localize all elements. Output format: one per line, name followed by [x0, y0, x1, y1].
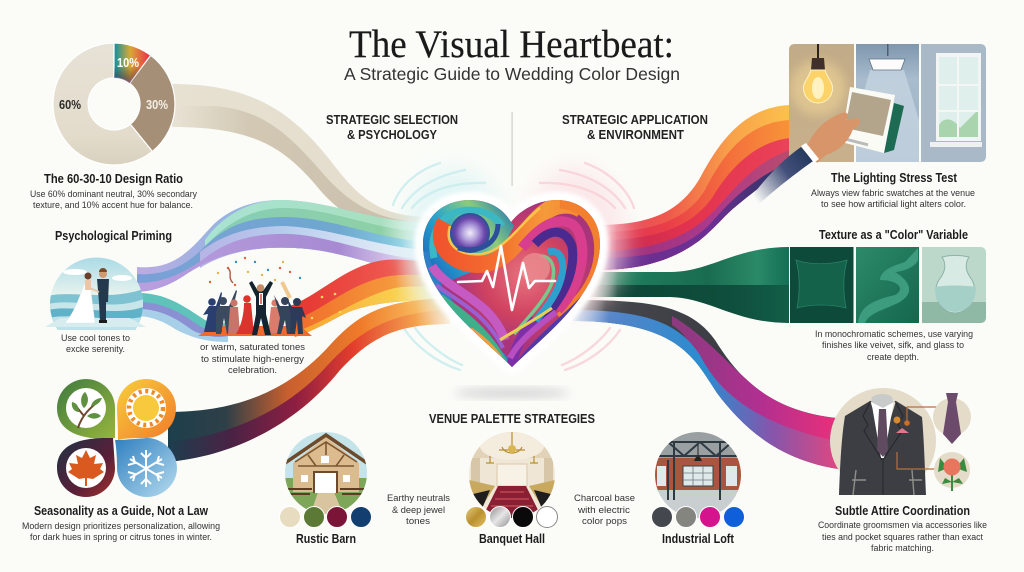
sleeve [752, 143, 819, 205]
dancer: red dress [236, 295, 254, 334]
ribbon: cool upper [137, 200, 425, 292]
text: barn palette [387, 493, 450, 527]
heading: venue palette strategies: VENUE PALETTE STRATEGIES [429, 411, 595, 426]
title: The Visual Heartbeat: [349, 23, 674, 66]
heading: psychological priming: Psychological Priming [55, 228, 172, 243]
text: design ratio: The 60-30-10 Design Ratio [44, 171, 183, 186]
tile: window daylight [921, 44, 986, 162]
tile: glass vase [922, 247, 986, 323]
donut chart: 60-30-10: 10% [117, 56, 139, 70]
text: design ratio: texture, and 10% accent hue for balance. [33, 200, 193, 211]
subtitle: A Strategic Guide to Wedding Color Design [344, 64, 680, 84]
text: texture [815, 329, 973, 363]
heart halo [423, 200, 600, 367]
swatches: loft [652, 506, 744, 528]
panel: lighting stress test [752, 44, 986, 205]
heart shadow [454, 389, 570, 397]
ribbon: warm [285, 259, 445, 337]
text: hall palette: with electric [577, 505, 630, 516]
text: design ratio: Use 60% dominant neutral, 30% secondary [30, 189, 197, 200]
text: cool tones: Use cool tones to [61, 333, 130, 344]
detail: tie [933, 393, 971, 444]
swatches: hall [466, 506, 558, 528]
text: cool tones: excke serenity. [66, 344, 125, 355]
dancer: dark far right [287, 298, 306, 334]
dancer: salmon [228, 299, 240, 334]
ribbon: emerald [590, 247, 789, 323]
text: texture: create depth. [867, 352, 919, 363]
jacket [839, 394, 926, 495]
heart with heartbeat line [423, 200, 600, 367]
ribbon: seasonality [168, 298, 450, 462]
text: seasonality: Modern design prioritizes personalization, allowing [22, 521, 220, 532]
text: warm tones: or warm, saturated tones [200, 342, 305, 353]
text: lighting: Always view fabric swatches at the venue [811, 188, 975, 199]
ribbon: cool lower [138, 293, 228, 342]
text: seasonality [22, 503, 220, 543]
text: design ratio [30, 171, 197, 211]
venue: industrial loft: Industrial Loft [662, 531, 735, 546]
text: lighting [811, 170, 975, 210]
dancer: grey suit [216, 290, 237, 334]
text: barn palette: tones [406, 516, 430, 527]
heading: strategic application: & ENVIRONMENT [587, 127, 684, 142]
tile: silk ribbon [856, 247, 919, 323]
swatch cards [841, 87, 904, 153]
dancer: dark right [274, 295, 293, 334]
panel: texture tiles [790, 247, 986, 323]
ribbon: charcoal magenta blue [572, 300, 839, 469]
venue: banquet hall [466, 432, 558, 546]
text: barn palette: Earthy neutrals [387, 493, 450, 504]
illustration: suit with accessories [830, 388, 971, 495]
donut chart: 60-30-10: 30% [146, 98, 168, 112]
icon: snowflake [128, 450, 164, 487]
text: attire: ties and pocket squares rather than exact [822, 532, 983, 543]
text: texture: In monochromatic schemes, use varying [815, 329, 973, 340]
heading: strategic selection: STRATEGIC SELECTION [326, 112, 458, 127]
venue: industrial loft [652, 432, 744, 546]
text: cool tones [61, 333, 130, 355]
swatches: barn [280, 506, 372, 528]
venue: banquet hall: Banquet Hall [479, 531, 545, 546]
text: attire: Coordinate groomsmen via accessories like [818, 520, 987, 531]
text: attire: Subtle Attire Coordination [835, 503, 970, 518]
dancer: blue dress [203, 292, 222, 332]
icon: sun [129, 391, 163, 425]
text: attire: fabric matching. [871, 543, 934, 554]
glow behind heart [393, 163, 634, 370]
text: seasonality: for dark hues in spring or citrus tones in winter. [30, 532, 212, 543]
text: attire [818, 503, 987, 554]
illustration: couple by the sea [45, 256, 146, 330]
hand holding swatch [807, 113, 860, 163]
tile: fluorescent [856, 44, 919, 162]
heading: texture: Texture as a "Color" Variable [819, 227, 968, 242]
icon: maple leaf [68, 450, 104, 486]
text: lighting: The Lighting Stress Test [831, 170, 958, 185]
venue: rustic barn: Rustic Barn [296, 531, 356, 546]
heading: strategic application [562, 112, 708, 142]
dancer: salmon right [268, 299, 282, 333]
text: warm tones: celebration. [228, 365, 277, 376]
heading: strategic selection: & PSYCHOLOGY [347, 127, 437, 142]
illustration: dancing crowd [198, 257, 312, 336]
connector lines [897, 407, 942, 469]
donut chart: 60-30-10: 60% [59, 98, 81, 112]
text: lighting: to see how artificial light alters color. [821, 199, 966, 210]
heartbeat line [458, 246, 555, 310]
ribbon: warm to purple, right [598, 105, 790, 270]
detail: boutonniere [934, 452, 970, 491]
icon: four seasons [57, 379, 177, 497]
tile: warm bulb [789, 44, 854, 162]
text: warm tones: to stimulate high-energy [201, 354, 304, 365]
text: hall palette: color pops [582, 516, 627, 527]
venue: rustic barn [280, 432, 372, 546]
text: warm tones [200, 342, 305, 376]
dancer: centre man [249, 281, 273, 335]
ribbon: beige neutral [172, 84, 425, 230]
text: hall palette [574, 493, 635, 527]
text: texture: finishes like veivet, sifk, and glass to [822, 340, 964, 351]
heading: strategic selection [326, 112, 458, 142]
text: seasonality: Seasonality as a Guide, Not a Law [34, 503, 209, 518]
heading: strategic application: STRATEGIC APPLICATION [562, 112, 708, 127]
tile: velvet pillow [790, 247, 854, 323]
text: barn palette: & deep jewel [392, 505, 445, 516]
text: hall palette: Charcoal base [574, 493, 635, 504]
icon: branch [72, 392, 102, 428]
donut chart: 60-30-10 [53, 43, 175, 165]
